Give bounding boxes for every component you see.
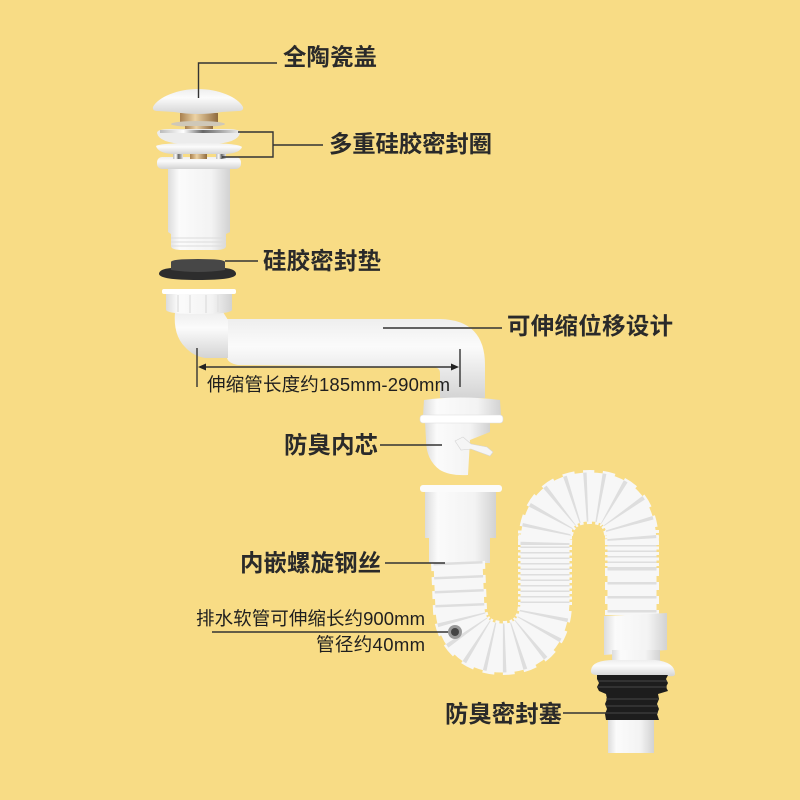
trap elbow — [425, 422, 490, 475]
nut rim — [162, 289, 236, 294]
trap cap — [423, 398, 501, 416]
sealing flange — [591, 660, 675, 676]
part: corrugated drain hose — [420, 485, 675, 753]
part: ceramic cap pop-up drain — [153, 89, 243, 250]
large fold teeth: lower bend, arch and descent — [458, 497, 632, 648]
label: gasket: 硅胶密封垫 — [263, 247, 381, 274]
part: odour trap core — [420, 398, 503, 475]
small disc — [171, 121, 225, 127]
leader: telescopic pipe — [383, 327, 502, 329]
leader: ceramic cap — [198, 63, 277, 98]
lower flange — [157, 157, 241, 169]
part: telescopic pipe — [162, 289, 485, 398]
label: ceramic cap: 全陶瓷盖 — [283, 44, 377, 70]
part: silicone gasket — [159, 259, 236, 280]
outlet tube — [608, 720, 654, 753]
label: hose length: 排水软管可伸缩长约900mm — [196, 608, 425, 629]
screws — [173, 152, 226, 159]
label: seal rings: 多重硅胶密封圈 — [329, 130, 492, 157]
label: hose diameter: 管径约40mm — [316, 634, 425, 655]
leader: hose — [212, 631, 450, 633]
leader: sealing plug — [563, 712, 606, 714]
hose body — [458, 497, 632, 648]
rubber plug — [597, 675, 668, 720]
dimension arrow — [197, 348, 460, 387]
hose collar — [604, 613, 667, 655]
top nut — [166, 294, 232, 314]
hose cup — [425, 490, 496, 563]
label: pipe length: 伸缩管长度约185mm-290mm — [207, 374, 450, 395]
leader: gasket — [225, 260, 258, 262]
label: odour core: 防臭内芯 — [284, 432, 378, 458]
fine ribs — [545, 545, 632, 603]
chrome disc — [157, 129, 240, 144]
fine rib teeth: riser and descent — [545, 530, 632, 605]
cap — [153, 89, 243, 114]
trap flange — [420, 415, 503, 423]
leader: odour core — [380, 444, 442, 446]
label: telescopic pipe: 可伸缩位移设计 — [507, 312, 673, 339]
drain body — [168, 168, 230, 250]
pipe — [227, 319, 485, 398]
marker dot — [448, 625, 462, 639]
trap lever — [455, 437, 493, 456]
upper brass stem — [180, 113, 218, 123]
white seal disc — [156, 143, 242, 154]
leader: spiral wire — [385, 562, 445, 564]
plug ribs — [598, 681, 667, 713]
elbow — [175, 312, 228, 358]
hose cup rim — [420, 485, 502, 492]
leader: seal rings — [222, 132, 323, 157]
label: sealing plug: 防臭密封塞 — [445, 700, 562, 727]
neck — [612, 650, 660, 662]
label: spiral wire: 内嵌螺旋钢丝 — [240, 550, 381, 576]
nut ridges — [178, 295, 218, 313]
fold ribs — [458, 497, 632, 648]
lower brass stem — [190, 152, 207, 159]
thread grooves — [171, 238, 226, 246]
